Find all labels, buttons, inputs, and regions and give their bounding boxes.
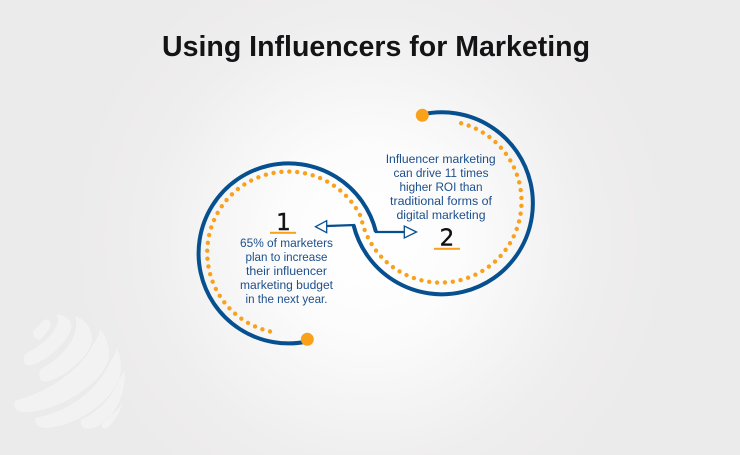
text block: step 2: Influencer marketing xyxy=(386,152,496,166)
text block: step 1 xyxy=(240,236,334,306)
text block: step 1: marketing budget xyxy=(240,278,334,292)
blue arc: step 1 xyxy=(199,163,376,343)
dot: step 1 arc end xyxy=(301,333,314,346)
text block: step 1: plan to increase xyxy=(246,250,328,264)
dot: step 2 arc start xyxy=(416,109,429,122)
text block: step 2: traditional forms of xyxy=(390,194,493,208)
text block: step 1: in the next year. xyxy=(246,292,328,306)
icon: faded globe watermark xyxy=(14,314,125,429)
arrow: pointing to step 2 xyxy=(375,226,416,238)
text block: step 1: their influencer xyxy=(246,264,327,278)
panel: step 2 ring with arrow xyxy=(354,109,533,294)
title: Using Influencers for Marketing xyxy=(162,31,590,63)
number 1 with underline: 1 xyxy=(276,210,291,236)
text block: step 2: digital marketing xyxy=(396,208,486,222)
text block: step 2: can drive 11 times xyxy=(394,166,488,180)
text block: step 1: 65% of marketers xyxy=(240,236,333,250)
text block: step 2: higher ROI than xyxy=(400,180,483,194)
number 2 with underline xyxy=(434,226,460,252)
arrow: pointing to step 1 xyxy=(316,221,355,233)
panel: step 1 ring with arrow xyxy=(199,163,376,346)
number 1 with underline xyxy=(270,210,296,236)
text block: step 2 xyxy=(386,152,496,222)
dotted orange S-curve xyxy=(207,122,522,332)
blue arc: step 2 xyxy=(354,112,533,294)
number 2 with underline: 2 xyxy=(440,226,454,252)
